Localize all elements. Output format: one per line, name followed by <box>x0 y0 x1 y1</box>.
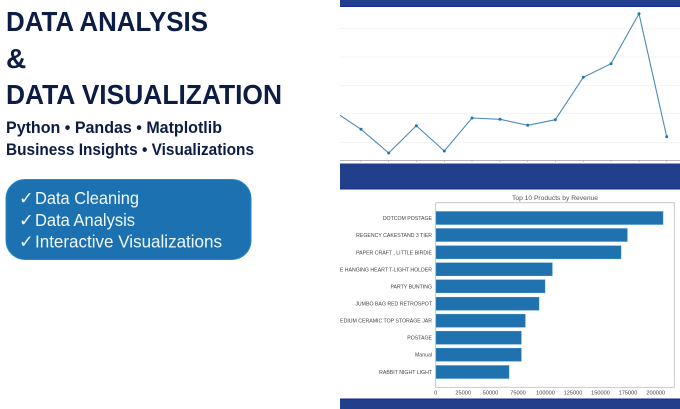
x axis tick labels: 0 <box>434 390 437 396</box>
subtitle: tools and topics: Business Insights • Visualizations <box>6 140 254 159</box>
callout: skills list <box>6 180 251 260</box>
chart title: Top 10 Products by Revenue <box>512 195 598 202</box>
bottom blue band <box>340 398 680 409</box>
skill: data analysis: Data Analysis <box>35 210 135 230</box>
product labels: DOTCOM POSTAGE <box>383 216 433 222</box>
x axis tick labels: 50000 <box>483 390 498 396</box>
bar chart: top 10 products by revenue <box>336 195 674 396</box>
skill: interactive visualizations: ✓ <box>19 232 34 252</box>
product labels: Manual <box>415 353 432 359</box>
title: DATA ANALYSIS <box>6 6 208 37</box>
skill: interactive visualizations: Interactive Visualizations <box>35 232 222 252</box>
x axis tick labels: 200000 <box>646 390 665 396</box>
product labels <box>336 216 433 376</box>
x axis tick labels: 25000 <box>455 390 471 396</box>
line chart <box>340 12 680 162</box>
product labels: E HANGING HEART T-LIGHT HOLDER <box>340 267 432 273</box>
product labels: PARTY BUNTING <box>390 284 432 290</box>
product labels: JUMBO BAG RED RETROSPOT <box>355 302 433 308</box>
x axis tick labels: 150000 <box>591 390 610 396</box>
subtitle: tools and topics: Python • Pandas • Matplotlib <box>6 118 222 137</box>
product labels: PAPER CRAFT , LITTLE BIRDIE <box>356 250 433 256</box>
middle blue band <box>340 164 680 190</box>
title: DATA VISUALIZATION <box>6 79 282 110</box>
bars <box>436 212 663 378</box>
product labels: MEDIUM CERAMIC TOP STORAGE JAR <box>336 319 432 325</box>
x axis tick labels: 125000 <box>564 390 582 396</box>
title <box>6 6 282 110</box>
x axis tick labels: 100000 <box>536 390 555 396</box>
x axis tick labels: 175000 <box>619 390 637 396</box>
skill: data cleaning: ✓ <box>19 188 34 208</box>
top blue band <box>340 0 680 7</box>
x axis tick labels: 75000 <box>510 390 526 396</box>
skill: data analysis: ✓ <box>19 210 34 230</box>
product labels: POSTAGE <box>407 336 433 342</box>
x axis tick labels <box>434 390 665 394</box>
product labels: REGENCY CAKESTAND 3 TIER <box>356 233 432 239</box>
product labels: RABBIT NIGHT LIGHT <box>379 370 433 376</box>
skill: data cleaning: Data Cleaning <box>35 188 139 208</box>
subtitle: tools and topics <box>6 118 254 159</box>
title: & <box>6 43 26 74</box>
